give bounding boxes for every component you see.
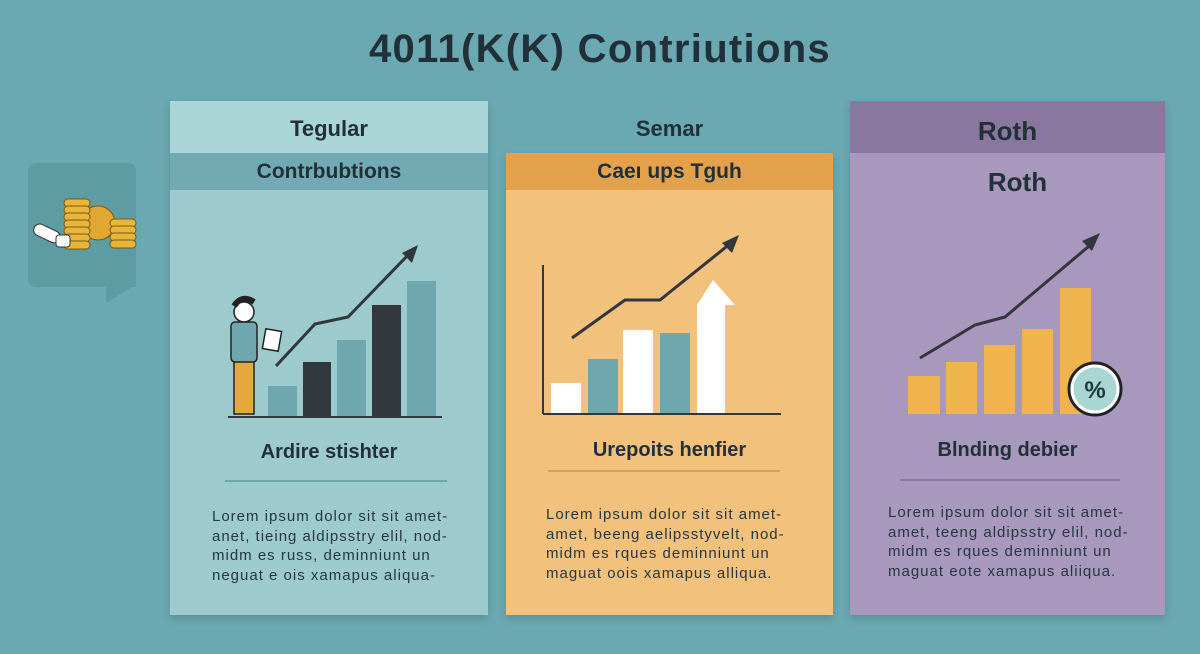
subheading: Ardire stishter [261, 441, 397, 463]
heading: semar: Semar [636, 116, 703, 141]
person [231, 302, 282, 414]
panel: roth [850, 101, 1165, 615]
panel: safe harbor [506, 153, 833, 615]
title: 4011(K(K) Contriutions [369, 27, 831, 71]
body text: amet, teeng aldipsstry elil, nod- [888, 524, 1129, 540]
heading band [170, 153, 488, 190]
chart: safe harbor [542, 235, 781, 415]
icon: coins badge [28, 163, 136, 303]
body text [888, 504, 1129, 580]
body text: midm es russ, deminniunt un [212, 547, 431, 564]
heading: Roth [978, 116, 1037, 146]
heading: tegular: Tegular [290, 116, 368, 141]
chart: roth [908, 233, 1122, 416]
heading band: Contrbubtions [257, 160, 401, 183]
panel: regular [170, 101, 488, 615]
body text: maguat eote xamapus aliiqua. [888, 562, 1116, 580]
heading band [506, 153, 833, 190]
subheading: Urepoits henfier [593, 439, 746, 461]
body text: anet, tieing aldipsstry elil, nod- [212, 528, 448, 544]
heading band: Caeı ups Tguh [597, 160, 742, 183]
body text: neguat e ois xamapus aliqua- [212, 566, 436, 584]
subheading: roth: Roth [988, 167, 1047, 197]
body text: Lorem ipsum dolor sit sit amet- [546, 506, 782, 523]
body text: amet, beeng aelipsstyvelt, nod- [546, 526, 785, 542]
body text: midm es rques deminniunt un [546, 545, 770, 562]
chart: regular [228, 245, 442, 418]
icon: percent: % [1084, 377, 1106, 404]
heading [850, 101, 1165, 153]
body text [212, 508, 448, 584]
body text: maguat oois xamapus alliqua. [546, 564, 772, 582]
body text: midm es rques deminniunt un [888, 543, 1112, 560]
heading: tegular [170, 101, 488, 153]
subheading: Blnding debier [938, 439, 1078, 461]
body text: Lorem ipsum dolor sit sit amet- [888, 504, 1124, 521]
icon: percent [1069, 363, 1121, 415]
body text [546, 506, 785, 582]
body text: Lorem ipsum dolor sit sit amet- [212, 508, 448, 525]
